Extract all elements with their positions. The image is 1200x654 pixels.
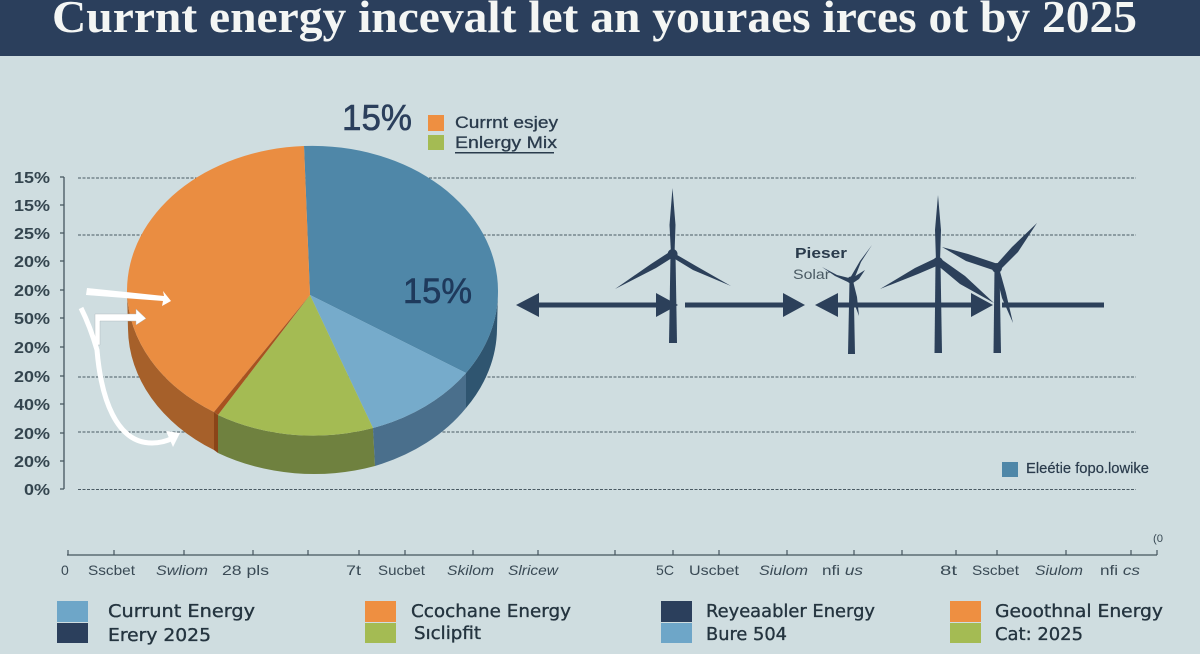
y axis with percentage labels xyxy=(14,170,64,499)
bottom legend: column 1: Erery 2025 xyxy=(108,625,211,646)
arrow: elbow xyxy=(95,309,146,345)
top callout value: 15% xyxy=(342,97,412,138)
x axis with labels: 28 pls xyxy=(222,562,269,578)
solar label xyxy=(793,245,847,282)
x axis with labels: 5C xyxy=(656,562,674,578)
pie value label: 15% xyxy=(403,272,472,311)
bottom legend: column 3: Reyeaabler Energy xyxy=(706,601,875,622)
y axis with percentage labels: 20% xyxy=(14,340,50,357)
solar label: Pieser xyxy=(795,245,847,262)
bottom legend: column 4: Geoothnal Energy xyxy=(995,601,1163,622)
x axis with labels: Uscbet xyxy=(689,562,739,578)
y axis with percentage labels: 20% xyxy=(14,454,50,471)
top legend: Currnt esjey xyxy=(455,113,559,132)
y axis with percentage labels: 20% xyxy=(14,254,50,271)
y axis with percentage labels: 20% xyxy=(14,283,50,300)
x axis with labels: 7t xyxy=(346,562,361,578)
top legend: Enlergy Mix xyxy=(455,133,558,152)
x axis with labels: Siulom xyxy=(759,562,808,578)
x axis with labels xyxy=(61,533,1163,578)
x axis with labels: Sucbet xyxy=(378,562,425,578)
bottom legend: column 3 xyxy=(661,601,875,645)
y axis with percentage labels: 25% xyxy=(14,226,50,243)
icon: wind turbine 4 xyxy=(942,223,1037,353)
right side legend note: Eleétie fopo.lowike xyxy=(1026,460,1149,477)
arrow: straight xyxy=(86,288,171,306)
y axis with percentage labels: 15% xyxy=(14,170,50,187)
x axis with labels: Skilom xyxy=(447,562,494,578)
x axis with labels: nfi us xyxy=(822,562,863,578)
bottom legend: column 2: Sıclipfit xyxy=(414,623,481,644)
bottom legend: column 1: Currunt Energy xyxy=(108,601,255,622)
y axis with percentage labels: 20% xyxy=(14,426,50,443)
y axis with percentage labels: 20% xyxy=(14,369,50,386)
bottom legend: column 4 xyxy=(950,601,1163,645)
white arrows pointing at the pie xyxy=(81,288,180,447)
icon: wind turbine 3 xyxy=(880,195,994,353)
y axis with percentage labels: 40% xyxy=(14,397,50,414)
y axis with percentage labels: 50% xyxy=(14,311,50,328)
x axis with labels: Swliom xyxy=(156,562,208,578)
bottom legend: column 2 xyxy=(365,601,571,644)
y axis with percentage labels: 0% xyxy=(24,482,50,499)
slice divider xyxy=(214,295,310,415)
x axis with labels: Sscbet xyxy=(88,562,135,578)
x axis with labels: Slricew xyxy=(508,562,559,578)
double arrows row xyxy=(516,293,1104,317)
pie side walls xyxy=(127,291,498,474)
y axis with percentage labels: 15% xyxy=(14,198,50,215)
x axis with labels: Sscbet xyxy=(972,562,1019,578)
slice: green xyxy=(218,295,373,436)
x axis with labels: (0 xyxy=(1153,533,1163,545)
top legend xyxy=(428,113,559,154)
slice: blue xyxy=(304,146,498,373)
3D pie chart xyxy=(127,146,498,474)
bottom legend: column 2: Ccochane Energy xyxy=(411,601,571,622)
x axis with labels: 8t xyxy=(940,562,957,578)
icon: wind turbine 1 xyxy=(615,188,731,343)
x axis with labels: nfi cs xyxy=(1100,562,1140,578)
bottom legend: column 3: Bure 504 xyxy=(706,624,787,645)
icon: wind turbine 2 xyxy=(822,245,872,354)
slice: orange xyxy=(127,146,310,412)
slice: light blue xyxy=(310,295,466,428)
solar label: Solar xyxy=(793,266,830,282)
bottom legend: column 1 xyxy=(57,601,255,646)
bottom legend: column 4: Cat: 2025 xyxy=(995,624,1083,645)
x axis with labels: Siulom xyxy=(1035,562,1083,578)
arrow: curved xyxy=(81,308,173,443)
arrow: curved head xyxy=(166,431,180,447)
x axis with labels: 0 xyxy=(61,562,69,578)
title banner xyxy=(0,0,1200,56)
